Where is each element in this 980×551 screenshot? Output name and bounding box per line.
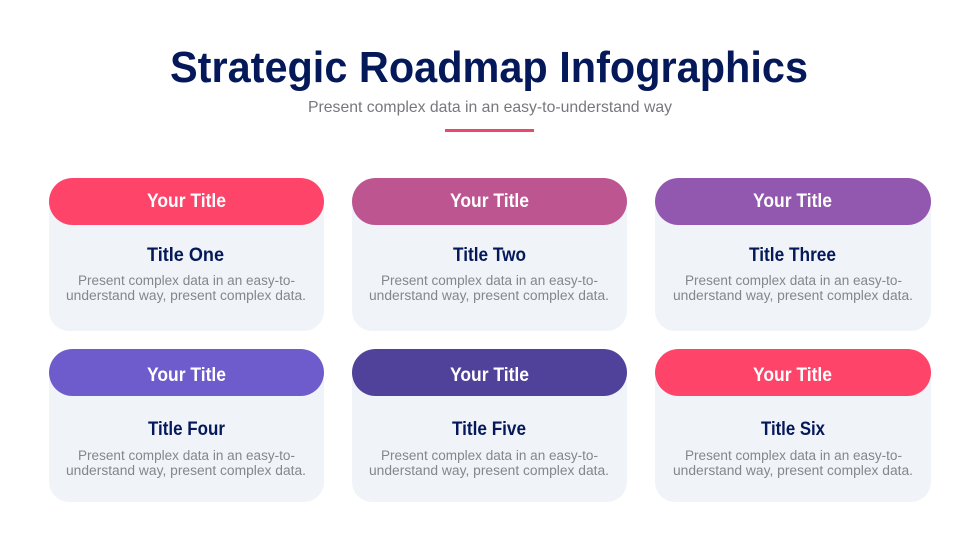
panel: card five [352,349,627,502]
pill header [352,178,627,225]
pill title: Your Title [147,191,226,212]
pill header [655,178,931,225]
title: Strategic Roadmap Infographics [170,43,808,92]
card description: understand way, present complex data. [369,288,609,303]
card body [655,190,931,331]
pill title: Your Title [450,191,529,212]
card description: understand way, present complex data. [66,463,306,478]
card description: Present complex data in an easy-to- [78,448,295,463]
panel: card two [352,178,627,331]
card description [369,273,609,303]
panel: card one [49,178,324,331]
card description: Present complex data in an easy-to- [685,448,902,463]
panel: card six [655,349,931,502]
card body [655,361,931,502]
pill header [49,178,324,225]
card description: understand way, present complex data. [673,288,913,303]
card description [673,273,913,303]
card body [49,190,324,331]
card body [352,190,627,331]
pill header [49,349,324,396]
card description: understand way, present complex data. [369,463,609,478]
card body [49,361,324,502]
panel: card three [655,178,931,331]
card description: Present complex data in an easy-to- [78,273,295,288]
panel: card four [49,349,324,502]
card heading: Title Four [148,419,226,440]
card description: Present complex data in an easy-to- [381,448,598,463]
card description: understand way, present complex data. [673,463,913,478]
pill title: Your Title [753,365,832,386]
card description [369,448,609,478]
pill header [352,349,627,396]
card description: Present complex data in an easy-to- [685,273,902,288]
subtitle: Present complex data in an easy-to-understand way [308,99,672,116]
pill title: Your Title [147,365,226,386]
pill title: Your Title [753,191,832,212]
accent underline [445,129,534,132]
card body [352,361,627,502]
card heading: Title Three [749,245,836,266]
card heading: Title Five [452,419,526,440]
pill header [655,349,931,396]
card description [673,448,913,478]
card heading: Title One [147,245,224,266]
card heading: Title Six [761,419,825,440]
card description: understand way, present complex data. [66,288,306,303]
card description [66,273,306,303]
pill title: Your Title [450,365,529,386]
card heading: Title Two [453,245,526,266]
card description: Present complex data in an easy-to- [381,273,598,288]
card description [66,448,306,478]
